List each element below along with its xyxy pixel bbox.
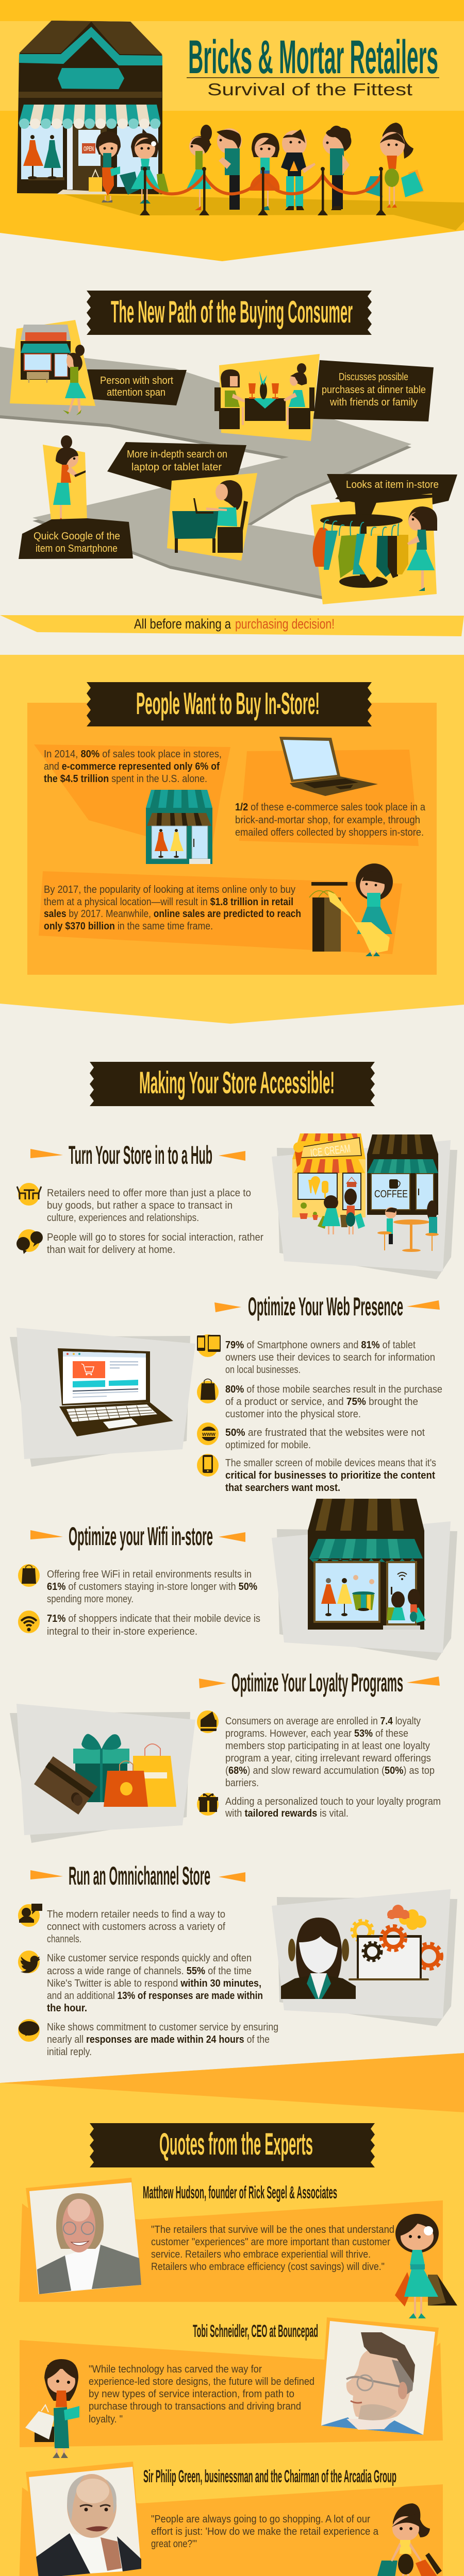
- label: more in-depth search: [107, 442, 246, 490]
- label: discusses possible purchases: Discusses possible: [339, 371, 408, 383]
- heading banner: [87, 291, 372, 335]
- text block: half of e-commerce: [235, 750, 426, 846]
- sub-section: turn your store into a hub: [16, 1133, 457, 1279]
- bullet: 50 percent frustrated: www: [202, 1431, 216, 1437]
- text block: half of e-commerce: emailed offers collected by shoppers in-store.: [235, 827, 424, 838]
- quote text: loyalty. ": [89, 2414, 123, 2425]
- illustration: shoppers at door: [383, 1589, 426, 1630]
- quote text: "People are always going to go shopping. A lot of our: [151, 2514, 370, 2525]
- illustration: gifts and card on paper: [10, 1704, 195, 1843]
- figure: woman with flower: [120, 129, 169, 204]
- bullet: tailored rewards: with tailored rewards is vital.: [225, 1808, 349, 1819]
- figure: man with curly hair: [323, 126, 352, 210]
- quote text: service. Retailers who embrace experiential will thrive.: [151, 2249, 371, 2260]
- ribbon: all before making a purchasing decision: All before making a: [134, 616, 231, 632]
- figure: woman with ponytail: [376, 2503, 442, 2576]
- bullet: connect across channels: channels.: [47, 1934, 81, 1945]
- figure: man with teal shirt: [217, 128, 242, 210]
- quote: sir philip green: [19, 2462, 443, 2576]
- text block: 2017 prediction: [39, 871, 402, 954]
- quote text: Retailers who embrace efficiency (cost savings) will dive.": [151, 2261, 385, 2273]
- bullet: connect across channels: The modern retailer needs to find a way to: [47, 1909, 225, 1920]
- figure: headset agent: [281, 1918, 356, 1999]
- text block: half of e-commerce: 1/2 of these e-commerce sales took place in a: [235, 802, 426, 813]
- card: laptop search: [167, 473, 257, 561]
- text block: 2014 sales: [34, 744, 230, 845]
- illustration: support agent and gears on paper: [272, 1889, 457, 2026]
- photo: sir philip green: [26, 2462, 142, 2576]
- bullet: 79 percent of smartphone owners: 79% of Smartphone owners and 81% of tablet: [225, 1340, 416, 1351]
- photo: matthew hudson: [26, 2178, 142, 2294]
- bullet: mobile device integral: integral to their in-store experience.: [47, 1626, 197, 1637]
- bullet: tailored rewards: [197, 1793, 441, 1819]
- panel: quotes from the experts: [0, 2053, 464, 2576]
- bullet: 80 percent of mobile searches: customer into the physical store.: [225, 1409, 361, 1420]
- quote text: purchase through to transactions and driving brand: [89, 2401, 301, 2412]
- sub-section: optimize your web presence: [10, 1292, 442, 1494]
- quote: matthew hudson: [19, 2178, 457, 2318]
- photo: tobi schneidler: [321, 2317, 439, 2435]
- figure: walking woman: [63, 345, 86, 415]
- panel: hero: [0, 0, 464, 261]
- quote: tobi schneidler: [20, 2317, 443, 2458]
- bullet: 79 percent of smartphone owners: on local businesses.: [225, 1364, 301, 1376]
- label: quick google: [19, 518, 133, 559]
- bullet: place to buy goods: buy goods, but rather a space to transact in: [47, 1200, 233, 1211]
- bullet: enrolled in 7.4 programs: members stop participating in at least one loyalty: [225, 1740, 430, 1752]
- bullet: 80 percent of mobile searches: [197, 1379, 442, 1420]
- quote text: [151, 2224, 394, 2273]
- illustration: small storefront: [21, 325, 71, 383]
- bullet: nike customer service: and an additional 13% of responses are made within: [47, 1990, 263, 2002]
- illustration: woman with dress at rack: [309, 863, 393, 956]
- label: quick google: item on Smartphone: [36, 543, 118, 554]
- subheading: [30, 1522, 245, 1551]
- bullet: connect across channels: connect with customers across a variety of: [47, 1921, 225, 1933]
- text block: 2014 sales: In 2014, 80% of sales took place in stores,: [44, 749, 222, 760]
- quote text: customer "experiences" are more important than customer: [151, 2236, 390, 2248]
- illustration: clouds: [387, 1905, 426, 1930]
- text block: 2017 prediction: sales by 2017. Meanwhile, online sales are predicted to reach: [44, 908, 301, 920]
- bullet: nike customer service: Nike customer service responds quickly and often: [47, 1953, 252, 1964]
- bullet: nike customer service: [18, 1951, 263, 2014]
- title: Survival of the Fittest: [207, 80, 412, 99]
- bullet: free wifi: Offering free WiFi in retail environments results in: [47, 1569, 252, 1580]
- illustration: window display: [321, 1575, 375, 1616]
- figure: man in black shirt: [281, 129, 316, 210]
- subheading: [30, 1861, 245, 1890]
- card: dinner table discussion: [214, 354, 320, 441]
- bullet: commitment to customer service: nearly all responses are made within 24 hours of the: [47, 2034, 270, 2045]
- illustration: round clothes rack: [313, 495, 433, 588]
- illustration: gears: [352, 1920, 442, 1969]
- illustration: rope barrier: [140, 167, 386, 215]
- label: quick google: Quick Google of the: [34, 531, 120, 542]
- heading banner: [90, 1062, 375, 1106]
- subheading: Run an Omnichannel Store: [69, 1861, 210, 1890]
- label: looks at item in-store: [327, 474, 457, 504]
- quote text: great one?'": [151, 2538, 197, 2550]
- text block: 2017 prediction: only $370 billion in the same time frame.: [44, 921, 213, 932]
- illustration: dresses in window: [155, 829, 184, 858]
- ribbon: all before making a purchasing decision: [0, 615, 464, 636]
- illustration: teal storefront: [146, 790, 212, 864]
- quote text: "While technology has carved the way for: [89, 2364, 262, 2375]
- label: more in-depth search: More in-depth search on: [127, 449, 227, 460]
- bullet: free wifi: [18, 1564, 257, 1605]
- quote text: effort is just: 'How do we make the retail experience a: [151, 2526, 379, 2537]
- illustration: ice cream shop: [292, 1133, 366, 1220]
- illustration: striped awning: [19, 105, 161, 129]
- bullet: social interaction: People will go to stores for social interaction, rather: [47, 1232, 263, 1243]
- quote text: [89, 2364, 314, 2425]
- quote text: "The retailers that survive will be the ones that understand: [151, 2224, 394, 2235]
- label: discusses possible purchases: purchases at dinner table: [322, 384, 426, 396]
- panel: making your store accessible: [10, 1062, 457, 2058]
- heading banner: [87, 682, 372, 726]
- subheading: [30, 1141, 245, 1170]
- sub-section: optimize your loyalty programs: [10, 1668, 441, 1843]
- bullet: 79 percent of smartphone owners: owners use their devices to search for information: [225, 1352, 435, 1363]
- illustration: winding road: [0, 347, 411, 601]
- bullet: social interaction: than wait for delivery at home.: [47, 1244, 175, 1256]
- bullet: nike customer service: Nike's Twitter is able to respond within 30 minutes,: [47, 1978, 261, 1989]
- bullet: enrolled in 7.4 programs: (68%) and slow reward accumulation (50%) as top: [225, 1765, 435, 1776]
- bullet: commitment to customer service: initial reply.: [47, 2046, 92, 2058]
- bullet: mobile device integral: 71% of shoppers indicate that their mobile device is: [47, 1613, 260, 1624]
- bullet: smaller screens: The smaller screen of mobile devices means that it's: [225, 1458, 436, 1469]
- figure: woman with ponytail and teal bags: [364, 123, 424, 208]
- card: person with short attention span: [10, 320, 95, 415]
- bullet: smaller screens: that searchers want most.: [225, 1482, 340, 1494]
- bullet: tailored rewards: Adding a personalized touch to your loyalty program: [225, 1796, 441, 1807]
- heading banner: [90, 2123, 375, 2167]
- bullet: nike customer service: the hour.: [47, 2003, 87, 2014]
- panel: the new path of the buying consumer: [0, 291, 464, 636]
- illustration: table with wine and vase: [245, 371, 286, 421]
- bullet: enrolled in 7.4 programs: programs. However, each year 53% of these: [225, 1728, 408, 1739]
- bullet: mobile device integral: [18, 1611, 260, 1637]
- figure: woman with white bag: [25, 2359, 79, 2458]
- quote text: [151, 2514, 379, 2550]
- bullet: smaller screens: [197, 1454, 436, 1494]
- illustration: wifi store on paper: [272, 1499, 457, 1660]
- text block: 2017 prediction: By 2017, the popularity of looking at items online only to buy: [44, 884, 295, 895]
- figure: woman with phone: [53, 435, 86, 522]
- card: clothing rack: [311, 494, 437, 604]
- bullet: enrolled in 7.4 programs: barriers.: [225, 1777, 259, 1789]
- label: person with short attention span: Person with short: [100, 375, 173, 386]
- bullet: 80 percent of mobile searches: 80% of those mobile searches result in the purchase: [225, 1384, 442, 1395]
- illustration: brown laptop: [279, 737, 378, 796]
- illustration: desk and seated woman: [172, 480, 248, 553]
- text block: half of e-commerce: brick-and-mortar shop, for example, through: [235, 815, 420, 826]
- text block: 2014 sales: and e-commerce represented only 6% of: [44, 761, 220, 772]
- bullet: social interaction: [16, 1229, 263, 1256]
- ribbon: all before making a purchasing decision: purchasing decision!: [235, 616, 335, 632]
- bullet: free wifi: 61% of customers staying in-store longer with 50%: [47, 1581, 257, 1592]
- figure: browsing woman: [407, 506, 437, 591]
- bullet: commitment to customer service: [18, 2019, 278, 2058]
- figure: woman with orange skirt: [250, 133, 279, 210]
- bullet: 50 percent frustrated: optimized for mobile.: [225, 1439, 311, 1451]
- bullet: 50 percent frustrated: 50% are frustrated that the websites were not: [225, 1427, 425, 1438]
- bullet: smaller screens: critical for businesses to prioritize the content: [225, 1470, 435, 1481]
- bullet: place to buy goods: [17, 1183, 251, 1224]
- illustration: coffee shop: COFFEE: [374, 1189, 408, 1200]
- bullet: commitment to customer service: Nike shows commitment to customer service by ensuring: [47, 2022, 278, 2033]
- illustration: left diner: [214, 369, 245, 429]
- quote text: experience-led store designs, the future will be defined: [89, 2376, 314, 2387]
- quote text: by new types of service interaction, from path to: [89, 2388, 294, 2400]
- sub-section: run an omnichannel store: [18, 1861, 457, 2058]
- label: discusses possible purchases: with friends or family: [329, 397, 418, 408]
- bullet: enrolled in 7.4 programs: program a year, citing irrelevant reward offerings: [225, 1753, 431, 1764]
- card: quick google on smartphone: [43, 435, 87, 525]
- illustration: shoppers and cafe table: [318, 1189, 439, 1252]
- illustration: laptop with shop page: [10, 1328, 195, 1467]
- bullet: place to buy goods: culture, experiences and relationships.: [47, 1212, 199, 1224]
- bullet: 80 percent of mobile searches: of a product or service, and 75% brought the: [225, 1396, 418, 1408]
- figure: woman with bun: [187, 125, 212, 210]
- bullet: nike customer service: across a wide range of channels. 55% of the time: [47, 1965, 252, 1977]
- subheading: Optimize your Wifi in-store: [69, 1522, 213, 1551]
- subheading: Turn Your Store in to a Hub: [69, 1141, 212, 1170]
- bullet: connect across channels: [18, 1904, 225, 1945]
- illustration: potted plants: [300, 1202, 318, 1220]
- illustration: ice cream and coffee shops on paper: [272, 1133, 457, 1279]
- label: looks at item in-store: Looks at item in-store: [346, 479, 439, 490]
- illustration: coffee shop: [367, 1134, 438, 1215]
- text block: 2017 prediction: them at a physical location—will result in $1.8 trillion in retail: [44, 896, 293, 908]
- illustration: shop front: [17, 21, 162, 194]
- label: person with short attention span: [87, 369, 187, 405]
- figure: woman with flower: [395, 2214, 457, 2318]
- bullet: enrolled in 7.4 programs: [197, 1710, 435, 1789]
- bullet: 50 percent frustrated: [197, 1422, 425, 1451]
- label: discusses possible purchases: [313, 360, 434, 421]
- illustration: shop front: OPEN: [84, 145, 94, 152]
- illustration: right diner: [284, 363, 314, 429]
- label: more in-depth search: laptop or tablet later: [131, 462, 222, 473]
- illustration: laptop: [349, 1926, 429, 1980]
- text block: 2014 sales: the $4.5 trillion spent in the U.S. alone.: [44, 773, 207, 785]
- label: person with short attention span: attention span: [107, 387, 165, 398]
- bullet: free wifi: spending more money.: [47, 1594, 134, 1605]
- illustration: window dresses: [23, 135, 61, 179]
- bullet: enrolled in 7.4 programs: Consumers on average are enrolled in 7.4 loyalty: [225, 1716, 421, 1727]
- illustration: ice cream icons: [308, 1176, 328, 1198]
- illustration: queue of shoppers: [89, 123, 424, 215]
- sub-section: optimize your wifi in-store: [18, 1499, 457, 1660]
- illustration: ice cream shop: ICE CREAM: [310, 1142, 351, 1160]
- panel: people want to buy in-store: [0, 655, 464, 1024]
- figure: woman with yellow bag: [89, 131, 121, 202]
- bullet: place to buy goods: Retailers need to offer more than just a place to: [47, 1188, 251, 1199]
- bullet: 79 percent of smartphone owners: [197, 1334, 435, 1376]
